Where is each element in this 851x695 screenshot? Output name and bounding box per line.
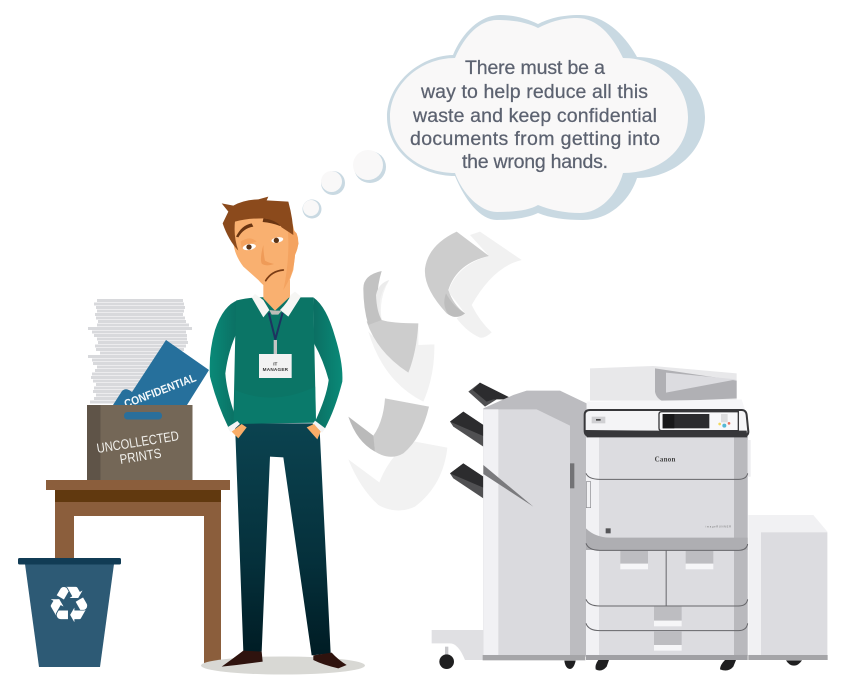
uncollected prints box: [87, 405, 192, 480]
drawer handles: [620, 551, 713, 651]
printer: [432, 366, 828, 671]
printer main body: [586, 436, 751, 660]
box label: [96, 428, 180, 467]
eyes and brows: [242, 243, 256, 251]
mouth: [266, 270, 283, 281]
folder label: CONFIDENTIAL: [123, 372, 198, 411]
man: IT manager: [210, 197, 347, 668]
brand text: Canon: [655, 455, 675, 463]
thought text: [410, 57, 660, 173]
shoes: [222, 651, 263, 667]
sweater and head: [210, 197, 342, 439]
table: [46, 480, 230, 667]
control panel: [585, 410, 748, 437]
thought text: documents from getting into: [410, 128, 660, 150]
side paper deck: [748, 515, 828, 660]
collar: [252, 294, 269, 317]
cuffs: [227, 421, 240, 432]
id badge: IT: [273, 362, 278, 367]
icon: recycle symbol: ♻: [47, 576, 91, 634]
id badge: [259, 354, 292, 378]
model text: imageRUNNER: [706, 525, 731, 529]
floating paper sheets: [348, 232, 522, 510]
finisher trays: [450, 383, 513, 498]
finisher foot: [432, 630, 485, 669]
hands: [232, 424, 247, 438]
scanner top: [587, 366, 745, 410]
thought cloud: [387, 15, 705, 220]
neck: [263, 280, 290, 311]
lanyard: [269, 313, 283, 339]
wheels: [564, 660, 802, 671]
thought text: way to help reduce all this: [420, 81, 648, 103]
finisher body: [483, 391, 587, 660]
thought bubbles: [302, 150, 386, 218]
thought text: the wrong hands.: [462, 151, 608, 173]
shadow under man: [201, 656, 365, 674]
trousers: [222, 423, 347, 668]
box label: UNCOLLECTED: [96, 428, 180, 456]
thought text: waste and keep confidential: [412, 105, 657, 127]
hair: [222, 197, 293, 251]
thought text: There must be a: [465, 57, 605, 79]
face: [233, 213, 299, 292]
recycling bin: [18, 558, 121, 667]
box label: PRINTS: [119, 446, 162, 467]
confidential folder: [113, 340, 209, 411]
paper stack: [88, 299, 192, 404]
id badge: MANAGER: [263, 367, 289, 372]
